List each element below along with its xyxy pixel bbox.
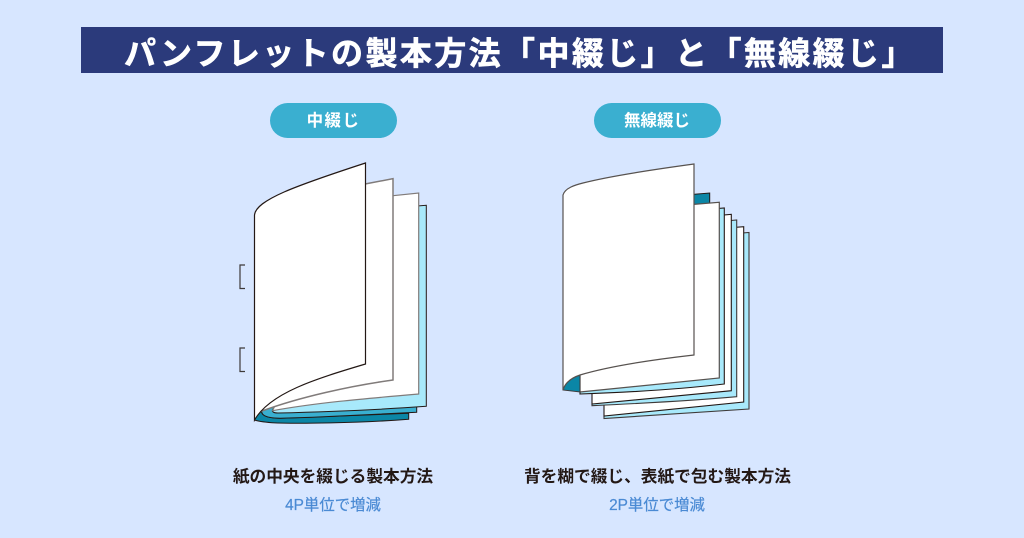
teal cover top bbox=[690, 193, 710, 205]
pill label: perfect binding: 無線綴じ bbox=[624, 111, 690, 130]
teal spine wedge bbox=[563, 375, 580, 392]
pill label: perfect binding bbox=[594, 103, 721, 138]
front page bbox=[254, 163, 366, 420]
title banner bbox=[81, 27, 943, 73]
back pages, layer 3 white bbox=[604, 227, 744, 416]
staple lower bbox=[240, 348, 245, 372]
illustration: perfect-bound booklet bbox=[563, 164, 749, 418]
layer 1 blue bbox=[580, 208, 724, 394]
back pages, layer 2 white bbox=[592, 214, 731, 404]
front page bbox=[563, 164, 694, 390]
pill label: saddle stitch: 中綴じ bbox=[307, 111, 360, 130]
third white page bbox=[272, 193, 419, 411]
second layer, mid blue bbox=[262, 404, 417, 418]
title text: パンフレットの製本方法「中綴じ」と「無線綴じ」 bbox=[124, 36, 916, 72]
caption: saddle stitch: 紙の中央を綴じる製本方法 bbox=[233, 466, 433, 486]
pill label: saddle stitch bbox=[270, 103, 397, 138]
illustration: saddle-stitched booklet bbox=[240, 163, 426, 423]
back pages, layer 3 blue bbox=[604, 232, 749, 418]
second white page bbox=[262, 179, 393, 411]
cover back, dark teal bbox=[254, 406, 409, 423]
caption: perfect binding: 背を糊で綴じ、表紙で包む製本方法 bbox=[524, 466, 791, 486]
note: 2P unit: 2P単位で増減 bbox=[609, 496, 705, 514]
light blue page bbox=[272, 205, 426, 413]
layer 1 white page bbox=[580, 202, 719, 392]
note: 4P unit: 4P単位で増減 bbox=[285, 496, 381, 514]
staple upper bbox=[240, 265, 245, 288]
back pages, layer 2 blue bbox=[592, 220, 737, 406]
